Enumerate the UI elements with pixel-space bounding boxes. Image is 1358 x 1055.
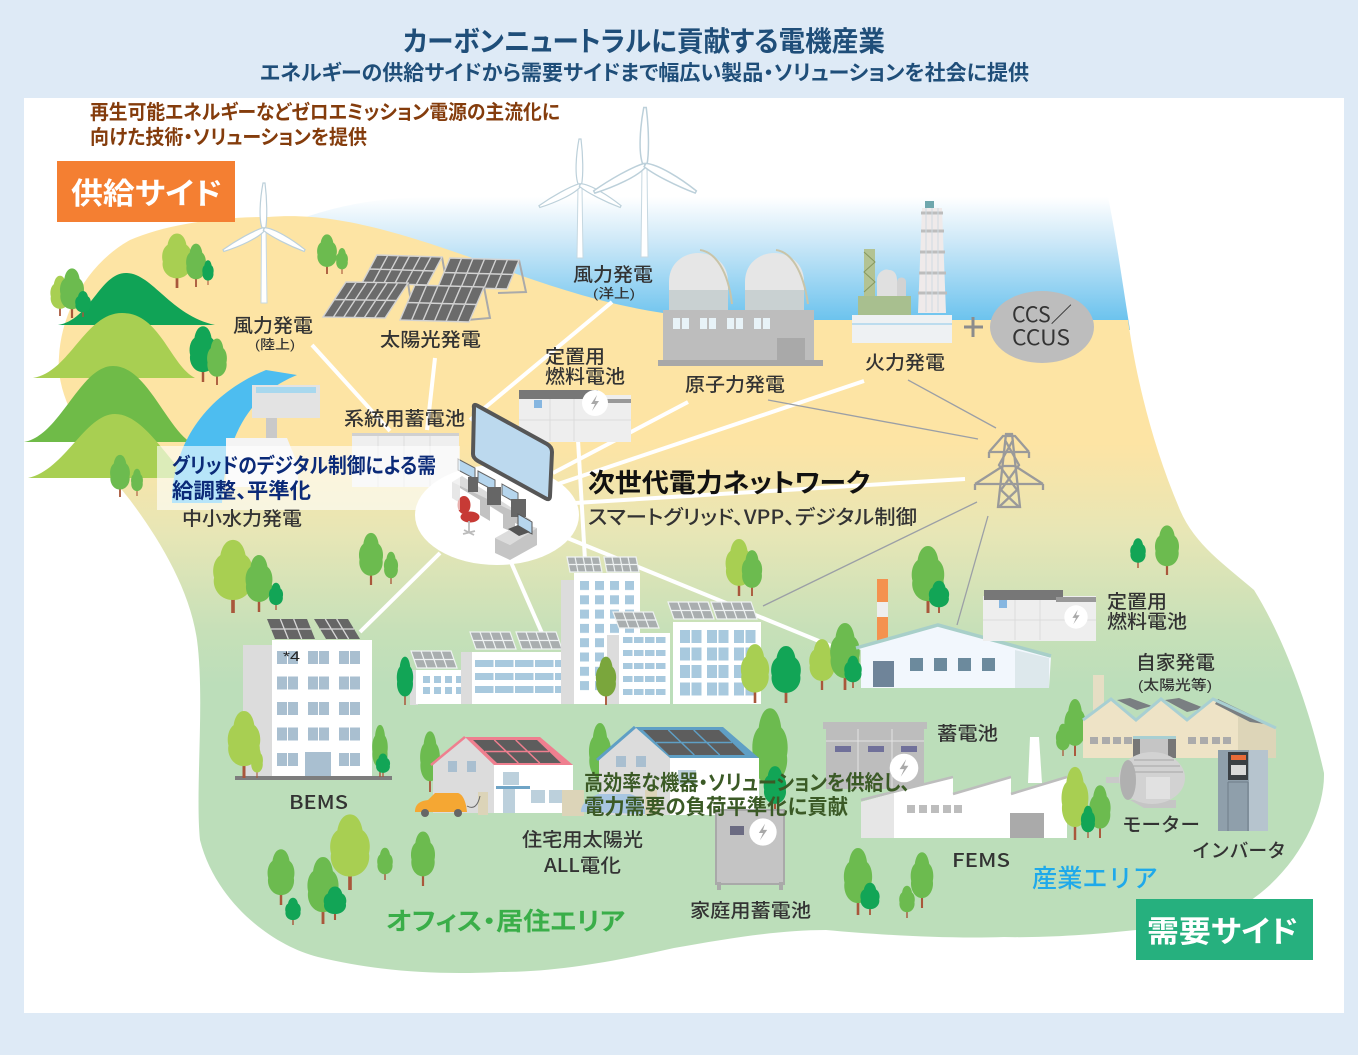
label: residential PV: 住宅用太陽光 bbox=[522, 829, 643, 851]
supply side description: 再生可能エネルギーなどゼロエミッション電源の主流化に bbox=[90, 100, 560, 124]
icon: house with pink roof and EV bbox=[415, 731, 573, 817]
icon: thermal plant bbox=[852, 201, 952, 343]
label: battery: 蓄電池 bbox=[937, 723, 998, 745]
label: demand fuel cell: 定置用 bbox=[1107, 591, 1167, 613]
icon: offshore wind turbines bbox=[538, 108, 698, 258]
next generation network heading: 次世代電力ネットワーク bbox=[588, 468, 870, 498]
supply side description bbox=[90, 100, 560, 149]
area label: industrial: 産業エリア bbox=[1032, 865, 1158, 893]
label: onshore wind bbox=[233, 315, 313, 352]
label: residential PV bbox=[522, 829, 643, 878]
translucent callout panel bbox=[157, 446, 460, 510]
trees: upper left bbox=[50, 233, 348, 497]
label: small hydro: 中小水力発電 bbox=[182, 508, 302, 530]
title: カーボンニュートラルに貢献する電機産業 bbox=[403, 26, 885, 57]
label: stationary fuel cell: 燃料電池 bbox=[545, 366, 625, 388]
icon: red chair bbox=[458, 496, 480, 535]
label: residential PV: ALL電化 bbox=[544, 851, 621, 878]
subtitle: エネルギーの供給サイドから需要サイドまで幅広い製品・ソリューションを社会に提供 bbox=[260, 62, 1029, 85]
icon: stationary fuel cell (supply) bbox=[519, 390, 631, 442]
label: thermal: 火力発電 bbox=[865, 352, 945, 374]
icon: house with blue roof and EV bbox=[562, 708, 788, 816]
icon: big screen bbox=[473, 405, 552, 499]
network lines bbox=[312, 302, 965, 657]
icon: grid battery bbox=[352, 433, 459, 487]
icon: beige solar factory bbox=[1056, 675, 1276, 758]
callout: digital grid control bbox=[172, 454, 436, 503]
label: private generation bbox=[1136, 652, 1215, 693]
icon: onshore wind turbine bbox=[222, 183, 306, 303]
demand side badge bbox=[1136, 899, 1313, 960]
icon: office district bbox=[397, 557, 801, 705]
CCS / CCUS bubble: CCS／ bbox=[1012, 299, 1072, 329]
icon: white FEMS factory bbox=[861, 737, 1111, 840]
thin transmission lines bbox=[763, 380, 996, 625]
icon: stationary fuel cell (demand) bbox=[983, 590, 1096, 641]
trees: middle band bbox=[213, 525, 1179, 613]
icon: transmission tower bbox=[975, 434, 1043, 507]
label: BEMS: BEMS bbox=[289, 788, 348, 815]
callout: demand side efficiency: 高効率な機器・ソリューションを供給し、 bbox=[584, 772, 910, 795]
control centre hub bbox=[415, 405, 579, 565]
label: motor: モーター bbox=[1122, 814, 1200, 836]
CCS / CCUS bubble: CCUS bbox=[1012, 322, 1070, 352]
CCS / CCUS bubble bbox=[990, 291, 1094, 363]
icon: small hydro dam bbox=[172, 370, 320, 503]
supply side badge: 供給サイド bbox=[71, 178, 222, 211]
icon: inverter bbox=[1218, 750, 1268, 831]
label: offshore wind: 風力発電 bbox=[573, 264, 653, 286]
mountains bbox=[24, 273, 215, 478]
label: demand fuel cell bbox=[1107, 591, 1187, 633]
label: private generation: 自家発電 bbox=[1136, 652, 1215, 674]
label: offshore wind: (洋上) bbox=[593, 286, 635, 301]
icon: blue chimney factory with orange stack bbox=[809, 579, 1051, 690]
callout: demand side efficiency bbox=[584, 772, 910, 819]
sea bbox=[300, 197, 1130, 330]
label: onshore wind: (陸上) bbox=[255, 337, 295, 352]
land map bbox=[59, 216, 1324, 973]
label: FEMS: FEMS bbox=[952, 846, 1010, 873]
label: home battery: 家庭用蓄電池 bbox=[690, 900, 811, 922]
label: private generation: (太陽光等) bbox=[1138, 677, 1212, 693]
icon: solar farm bbox=[323, 255, 526, 322]
label: onshore wind: 風力発電 bbox=[233, 315, 313, 337]
supply side badge bbox=[57, 161, 235, 222]
icon: industrial battery bbox=[823, 722, 927, 789]
label: inverter: インバータ bbox=[1192, 840, 1286, 862]
asterisk note: *4 bbox=[283, 648, 300, 664]
icon: home battery bbox=[716, 810, 784, 890]
icon: nuclear plant bbox=[658, 250, 823, 366]
demand side badge: 需要サイド bbox=[1147, 916, 1298, 949]
trees: lower area bbox=[268, 814, 933, 925]
next generation network heading bbox=[588, 468, 917, 530]
area label: office and residential: オフィス・居住エリア bbox=[386, 908, 625, 936]
label: demand fuel cell: 燃料電池 bbox=[1107, 611, 1187, 633]
icon: desks and monitors bbox=[452, 459, 537, 560]
supply side description: 向けた技術・ソリューションを提供 bbox=[90, 125, 367, 149]
label: solar: 太陽光発電 bbox=[380, 329, 481, 351]
label: offshore wind bbox=[573, 264, 653, 301]
callout: digital grid control: グリッドのデジタル制御による需 bbox=[172, 454, 436, 478]
callout: demand side efficiency: 電力需要の負荷平準化に貢献 bbox=[584, 796, 848, 819]
icon: motor bbox=[1106, 752, 1185, 808]
next generation network heading: スマートグリッド、VPP、デジタル制御 bbox=[588, 501, 917, 530]
callout: digital grid control: 給調整、平準化 bbox=[172, 480, 311, 503]
label: grid battery: 系統用蓄電池 bbox=[344, 408, 465, 430]
icon: plus sign bbox=[964, 317, 983, 337]
label: nuclear: 原子力発電 bbox=[685, 374, 785, 396]
icon: BEMS office building bbox=[228, 619, 392, 780]
label: stationary fuel cell: 定置用 bbox=[545, 346, 605, 368]
label: stationary fuel cell bbox=[545, 346, 625, 388]
